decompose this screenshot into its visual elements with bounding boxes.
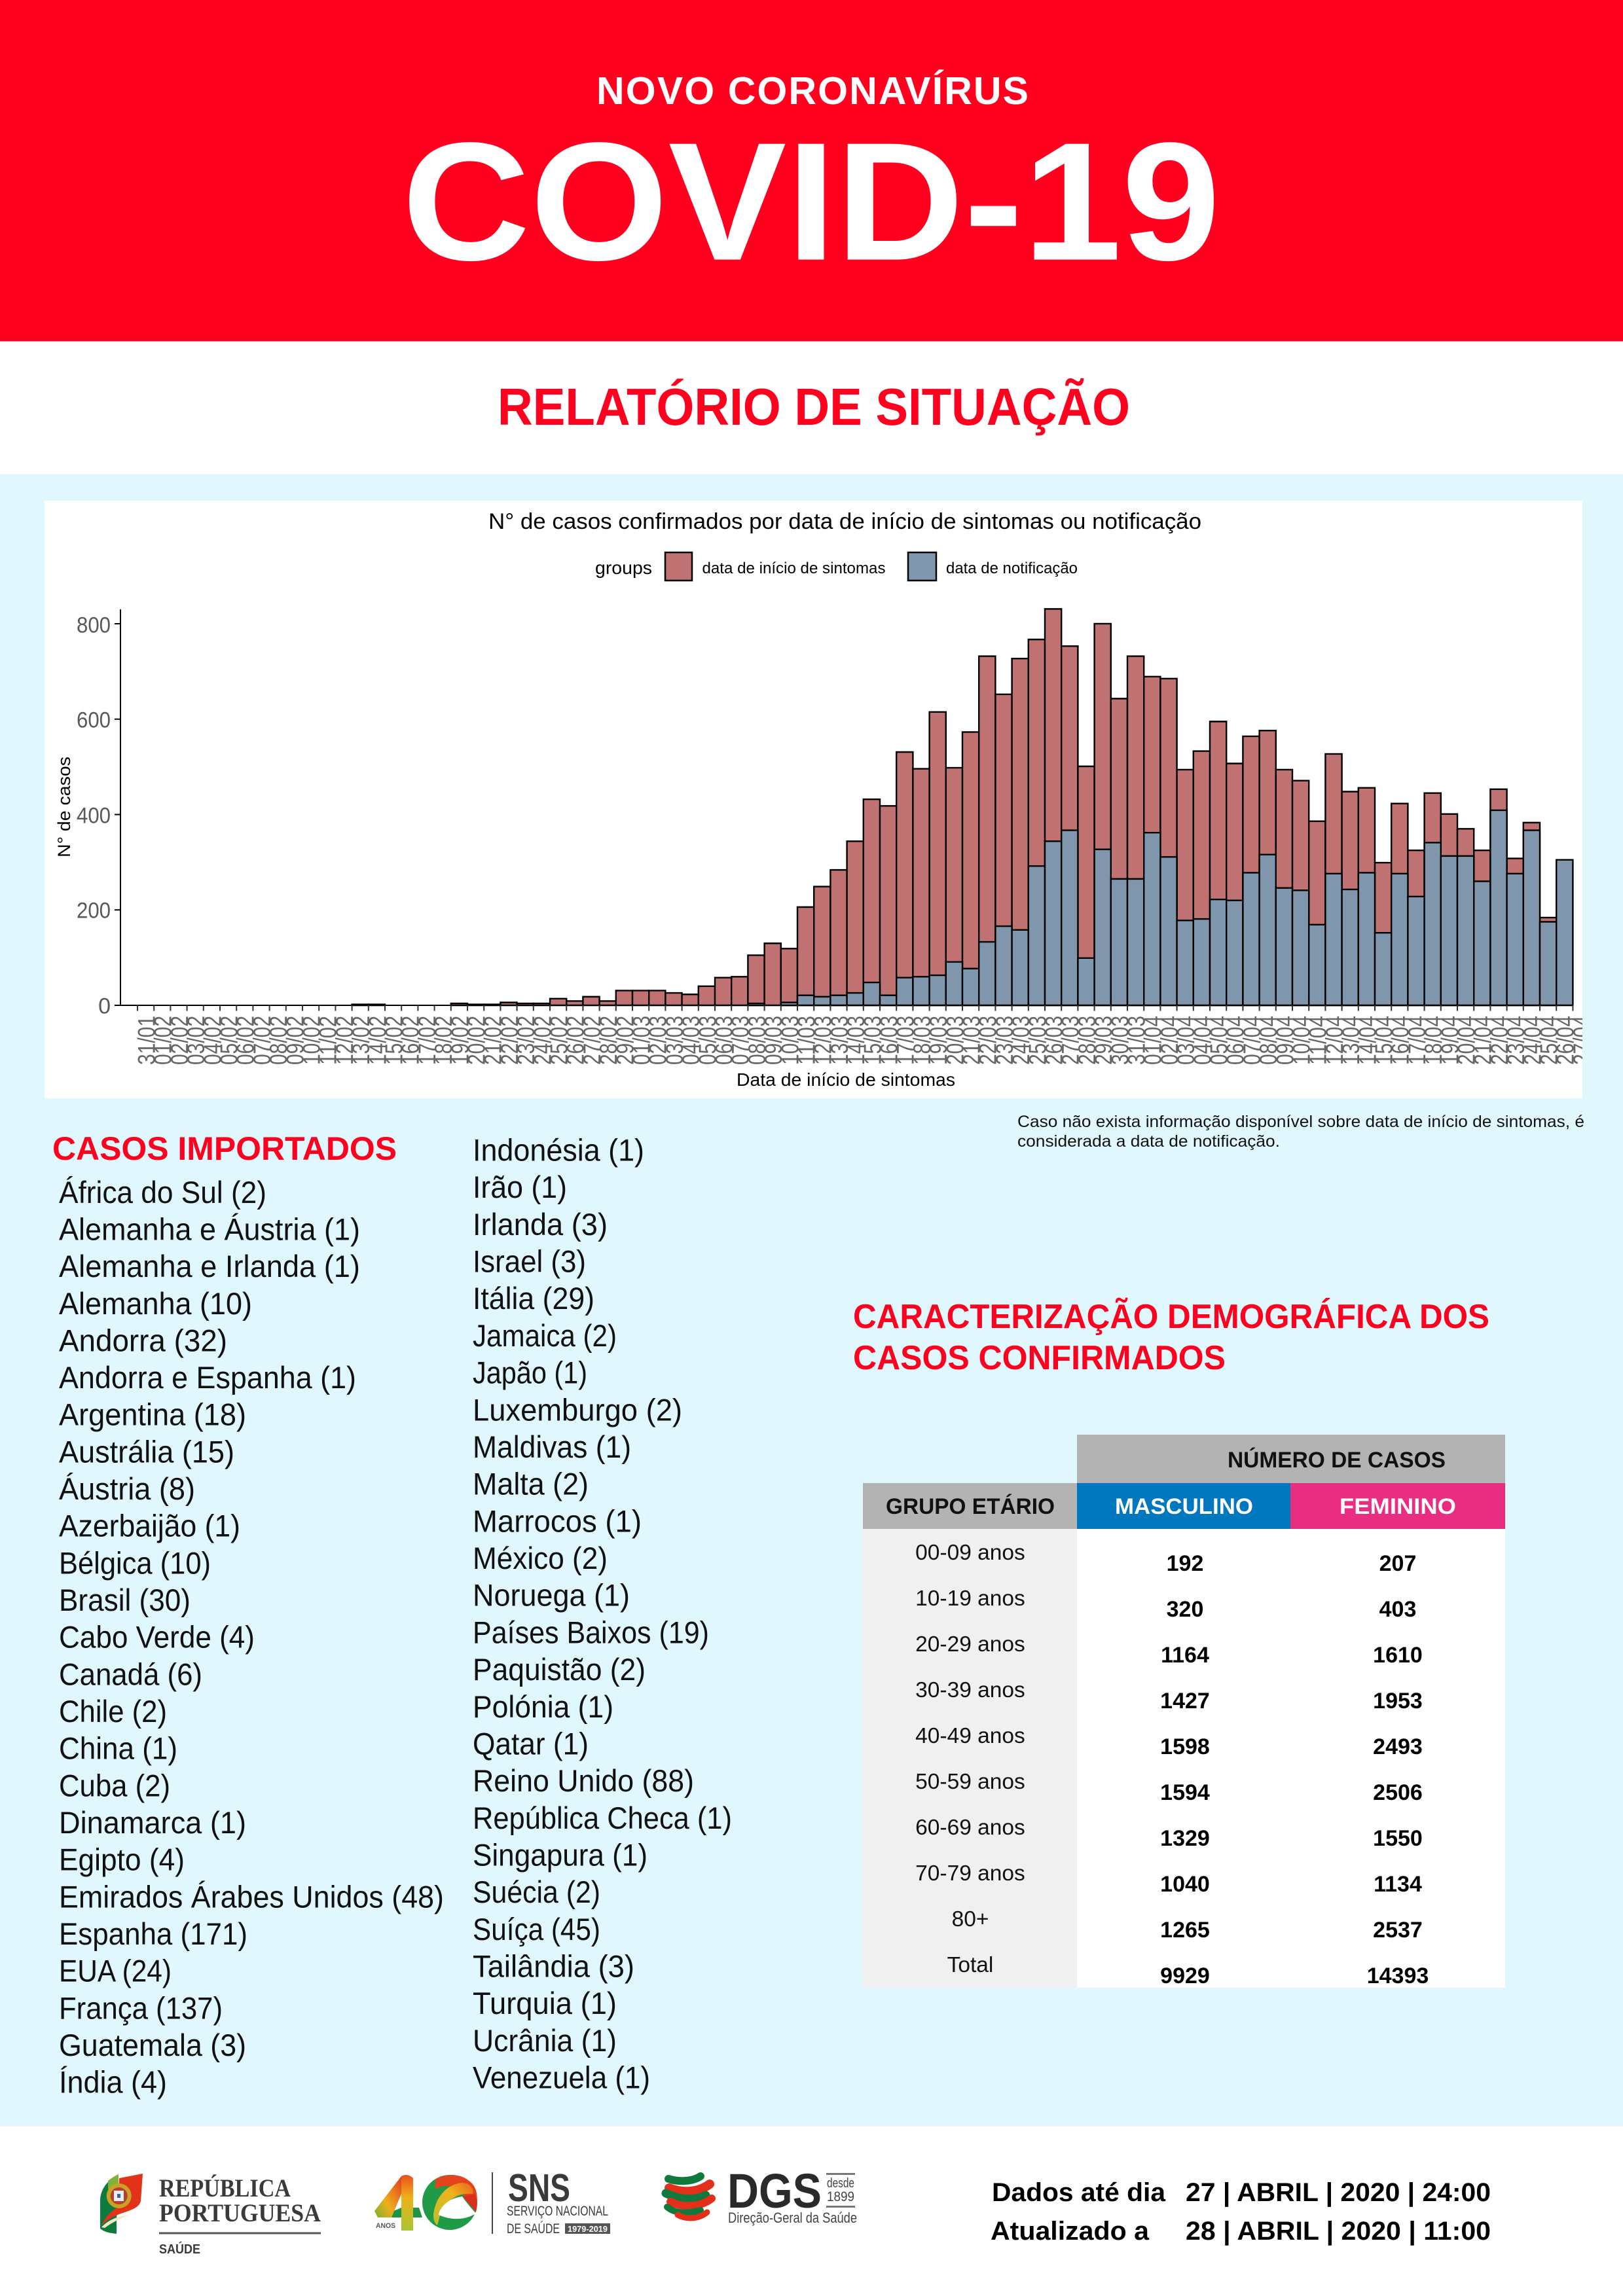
list: imported cases column 2: Venezuela (1) (473, 2060, 650, 2095)
list: imported cases column 2: República Checa (1) (473, 1801, 732, 1835)
x axis date labels: 20/04 (1453, 1016, 1480, 1065)
female case counts: 207 (1379, 1551, 1416, 1576)
demographic table (863, 1435, 1505, 1988)
x axis date labels: 09/02 (282, 1016, 308, 1065)
x axis date labels: 19/03 (925, 1016, 952, 1065)
x axis date labels: 06/03 (711, 1016, 737, 1065)
list: imported cases column 1: Dinamarca (1) (59, 1805, 246, 1840)
list: imported cases column 1: Austrália (15) (59, 1434, 234, 1469)
x axis date labels: 04/02 (199, 1016, 226, 1065)
list: imported cases column 2: Polónia (1) (473, 1689, 613, 1724)
x axis date labels: 06/02 (232, 1016, 259, 1065)
bars: data de início de sintomas (352, 609, 1556, 1005)
list: imported cases column 2: Malta (2) (473, 1467, 589, 1501)
list: imported cases column 2: Jamaica (2) (473, 1318, 617, 1353)
x axis date labels: 03/03 (661, 1016, 688, 1065)
x axis date labels: 02/04 (1156, 1016, 1183, 1065)
icon: DGS striped shield (666, 2176, 712, 2218)
x axis date labels: 16/02 (397, 1016, 424, 1065)
x axis date labels: 09/03 (760, 1016, 787, 1065)
male case counts: 1598 (1160, 1734, 1210, 1759)
x axis date labels: 27/03 (1057, 1016, 1084, 1065)
x axis date labels: 22/03 (975, 1016, 1002, 1065)
list: imported cases column 1: Cuba (2) (59, 1768, 170, 1803)
female case counts: 2506 (1373, 1780, 1423, 1805)
table header labels: MASCULINO (1115, 1494, 1253, 1519)
report heading: RELATÓRIO DE SITUAÇÃO (498, 378, 1130, 436)
x axis date labels: 05/04 (1206, 1016, 1232, 1065)
x axis date labels: 12/02 (331, 1016, 358, 1065)
x axis date labels: 14/02 (364, 1016, 391, 1065)
chart title: N° de casos confirmados por data de início de sintomas ou notificação (488, 509, 1201, 534)
x axis date labels: 12/03 (810, 1016, 837, 1065)
x axis date labels: 23/04 (1503, 1016, 1529, 1065)
y axis labels: 0 (98, 994, 111, 1018)
x axis date labels: 27/02 (579, 1016, 606, 1065)
list: imported cases column 2: Turquia (1) (473, 1986, 617, 2020)
x axis date labels: 19/04 (1436, 1016, 1463, 1065)
list: imported cases column 2: Irlanda (3) (473, 1207, 608, 1242)
x axis date labels: 23/02 (513, 1016, 539, 1065)
female case counts: 14393 (1367, 1964, 1429, 1988)
x axis date labels: 27/04 (1569, 1016, 1596, 1065)
male case counts: 1427 (1160, 1689, 1210, 1713)
logo: SNS 40 anos (374, 2166, 610, 2236)
list: imported cases column 1: Argentina (18) (59, 1397, 246, 1432)
chart legend: data de notificação (946, 560, 1078, 577)
list: imported cases column 2 (473, 1132, 732, 2095)
list: imported cases column 1: Índia (4) (59, 2065, 167, 2100)
x axis date labels: 10/02 (299, 1016, 325, 1065)
wordmark SNS: SNS (508, 2166, 570, 2210)
x axis date labels: 28/02 (595, 1016, 622, 1065)
female case counts: 1953 (1373, 1689, 1423, 1713)
main title: COVID-19 (402, 108, 1220, 296)
age group labels: 00-09 anos (915, 1541, 1025, 1565)
x axis date labels: 08/02 (265, 1016, 292, 1065)
x axis date labels: 10/04 (1288, 1016, 1315, 1065)
date block: 27 | ABRIL | 2020 | 24:00 (1186, 2178, 1491, 2207)
list: imported cases column 1: Canadá (6) (59, 1657, 202, 1691)
x axis date labels: 23/03 (991, 1016, 1018, 1065)
list: imported cases column 2: Qatar (1) (473, 1726, 589, 1761)
table header labels: NÚMERO DE CASOS (1228, 1448, 1446, 1473)
male case counts: 192 (1167, 1551, 1203, 1576)
light blue content panel (0, 474, 1623, 2126)
x axis date labels: 15/04 (1371, 1016, 1397, 1065)
list: imported cases column 1: Chile (2) (59, 1694, 167, 1729)
x axis date labels: 28/03 (1074, 1016, 1101, 1065)
female case counts: 2537 (1373, 1918, 1423, 1943)
x axis date labels: 24/04 (1519, 1016, 1546, 1065)
panel: epidemic curve chart (45, 501, 1596, 1098)
x axis date labels: 05/03 (694, 1016, 721, 1065)
y axis labels: 800 (77, 613, 111, 637)
list: imported cases column 1: Cabo Verde (4) (59, 1620, 255, 1655)
x axis date labels: 21/02 (480, 1016, 507, 1065)
chart legend: data de início de sintomas (702, 560, 885, 577)
x axis date labels: 17/03 (892, 1016, 919, 1065)
female case counts: 1610 (1373, 1643, 1423, 1668)
list: imported cases column 1: China (1) (59, 1731, 177, 1766)
list: imported cases column 2: Israel (3) (473, 1244, 586, 1279)
age group labels: 10-19 anos (915, 1587, 1025, 1611)
list: imported cases column 1: Alemanha e Áustria (1) (59, 1212, 360, 1247)
x axis date labels: 01/04 (1140, 1016, 1167, 1065)
x axis date labels: 31/01 (134, 1016, 160, 1065)
x axis date labels: 26/04 (1552, 1016, 1579, 1065)
x axis date labels: 13/02 (348, 1016, 374, 1065)
list: imported cases column 1 (59, 1175, 444, 2100)
x axis date labels: 29/03 (1090, 1016, 1117, 1065)
y axis title: N° de casos (54, 757, 74, 857)
x axis date labels: 25/04 (1536, 1016, 1562, 1065)
list: imported cases column 1: Guatemala (3) (59, 2028, 246, 2062)
list: imported cases column 1: Emirados Árabes Unidos (48) (59, 1879, 444, 1914)
female case counts: 2493 (1373, 1734, 1423, 1759)
list: imported cases column 2: Indonésia (1) (473, 1132, 644, 1168)
wordmark SNS: 1979-2019 (568, 2224, 608, 2234)
x axis date labels: 04/03 (678, 1016, 704, 1065)
list: imported cases column 2: Paquistão (2) (473, 1652, 646, 1687)
list: imported cases column 1: Bélgica (10) (59, 1545, 211, 1580)
heading: caracterização demográfica: CARACTERIZAÇÃO DEMOGRÁFICA DOS (853, 1297, 1489, 1336)
logo: república portuguesa (100, 2174, 321, 2257)
x axis date labels: 11/03 (793, 1016, 820, 1065)
male case counts: 1040 (1160, 1872, 1210, 1897)
x axis date labels: 21/03 (958, 1016, 985, 1065)
date block (991, 2178, 1491, 2246)
heading: caracterização demográfica: CASOS CONFIRMADOS (853, 1339, 1226, 1377)
list: imported cases column 2: Irão (1) (473, 1170, 567, 1204)
list: imported cases column 1: EUA (24) (59, 1954, 172, 1988)
male case counts: 9929 (1160, 1964, 1210, 1988)
chart legend (595, 552, 1078, 581)
x axis date labels: 07/03 (727, 1016, 754, 1065)
list: imported cases column 2: Luxemburgo (2) (473, 1392, 682, 1427)
wordmark: SAÚDE (159, 2241, 200, 2257)
x axis date labels: 16/04 (1387, 1016, 1414, 1065)
x axis date labels: 12/04 (1321, 1016, 1348, 1065)
x axis date labels: 02/03 (645, 1016, 672, 1065)
x axis date labels: 18/04 (1420, 1016, 1447, 1065)
x axis date labels: 20/02 (464, 1016, 490, 1065)
table header labels (886, 1448, 1456, 1519)
date block: Atualizado a (991, 2217, 1150, 2246)
x axis date labels: 03/02 (183, 1016, 210, 1065)
list: imported cases column 2: México (2) (473, 1541, 608, 1575)
x axis date labels: 15/03 (859, 1016, 886, 1065)
age group labels (915, 1541, 1025, 1977)
icon: flag emblem (100, 2174, 143, 2234)
wordmark DGS: desde (827, 2176, 854, 2191)
male case counts: 1265 (1160, 1918, 1210, 1943)
x axis date labels: 20/03 (941, 1016, 968, 1065)
x axis date labels (134, 1016, 1596, 1065)
x axis date labels: 08/03 (744, 1016, 771, 1065)
female case counts: 1134 (1374, 1872, 1422, 1897)
list: imported cases column 2: Suíça (45) (473, 1912, 600, 1946)
age group labels: Total (947, 1953, 993, 1977)
list: imported cases column 1: França (137) (59, 1990, 223, 2025)
list: imported cases column 2: Maldivas (1) (473, 1429, 631, 1464)
age group labels: 50-59 anos (915, 1770, 1025, 1794)
x axis date labels: 05/02 (216, 1016, 242, 1065)
chart legend: groups (595, 558, 652, 578)
icon: number 40 (374, 2175, 477, 2231)
x axis date labels: 11/02 (315, 1016, 342, 1065)
x axis date labels: 18/02 (430, 1016, 457, 1065)
x axis date labels: 07/04 (1239, 1016, 1266, 1065)
x axis date labels: 11/04 (1305, 1016, 1332, 1065)
x axis date labels: 25/02 (546, 1016, 572, 1065)
female case counts: 1550 (1373, 1826, 1423, 1851)
wordmark DGS: DGS (727, 2164, 822, 2218)
x axis date labels: 18/03 (909, 1016, 936, 1065)
x axis date labels: 06/04 (1222, 1016, 1249, 1065)
x axis date labels: 03/04 (1173, 1016, 1199, 1065)
bars: data de notificação (748, 810, 1573, 1005)
x axis date labels: 08/04 (1255, 1016, 1282, 1065)
chart footnote (1017, 1113, 1584, 1151)
x axis date labels: 01/03 (629, 1016, 655, 1065)
x axis date labels: 25/03 (1024, 1016, 1051, 1065)
heading: casos importados: CASOS IMPORTADOS (52, 1130, 397, 1167)
x axis date labels: 24/03 (1008, 1016, 1034, 1065)
list: imported cases column 1: Andorra (32) (59, 1323, 227, 1357)
male case counts: 1164 (1161, 1643, 1209, 1668)
x axis date labels: 24/02 (529, 1016, 556, 1065)
x axis date labels: 21/04 (1470, 1016, 1497, 1065)
x axis date labels: 13/03 (826, 1016, 853, 1065)
list: imported cases column 2: Reino Unido (88) (473, 1763, 694, 1798)
x axis date labels: 22/02 (496, 1016, 523, 1065)
list: imported cases column 1: Andorra e Espanha (1) (59, 1360, 356, 1395)
male case counts (1160, 1551, 1210, 1988)
age group labels: 70-79 anos (915, 1861, 1025, 1886)
x axis date labels: 30/03 (1106, 1016, 1133, 1065)
x axis title: Data de início de sintomas (737, 1069, 955, 1090)
list: imported cases column 1: Alemanha e Irlanda (1) (59, 1249, 360, 1283)
y axis labels: 200 (77, 898, 111, 923)
age group labels: 60-69 anos (915, 1816, 1025, 1840)
list: imported cases column 2: Japão (1) (473, 1355, 587, 1390)
age group labels: 80+ (952, 1907, 989, 1931)
list: imported cases column 2: Singapura (1) (473, 1838, 647, 1872)
x axis date labels: 17/04 (1404, 1016, 1431, 1065)
table header labels: GRUPO ETÁRIO (886, 1494, 1055, 1519)
list: imported cases column 1: Áustria (8) (59, 1471, 195, 1506)
y axis labels (77, 613, 111, 1018)
x axis date labels: 01/02 (150, 1016, 177, 1065)
list: imported cases column 2: Itália (29) (473, 1281, 594, 1316)
age group labels: 30-39 anos (915, 1678, 1025, 1702)
x axis date labels: 13/04 (1338, 1016, 1364, 1065)
x axis date labels: 22/04 (1486, 1016, 1513, 1065)
x axis date labels: 07/02 (249, 1016, 276, 1065)
date block: Dados até dia (992, 2178, 1166, 2207)
chart footnote: Caso não exista informação disponível sobre data de início de sintomas, é (1017, 1113, 1584, 1131)
age group labels: 40-49 anos (915, 1724, 1025, 1748)
wordmark SNS: SERVIÇO NACIONAL (507, 2204, 608, 2219)
x axis date labels: 16/03 (876, 1016, 902, 1065)
age group labels: 20-29 anos (915, 1632, 1025, 1657)
female case counts: 403 (1379, 1597, 1416, 1622)
wordmark DGS: Direção-Geral da Saúde (728, 2210, 857, 2226)
x axis date labels: 29/02 (611, 1016, 638, 1065)
header kicker: NOVO CORONAVÍRUS (596, 69, 1029, 113)
wordmark SNS: DE SAÚDE (507, 2221, 560, 2236)
x axis date labels: 04/04 (1189, 1016, 1216, 1065)
x axis date labels: 09/04 (1271, 1016, 1298, 1065)
male case counts: 1329 (1160, 1826, 1210, 1851)
wordmark DGS: 1899 (827, 2189, 854, 2204)
x axis date labels: 26/03 (1041, 1016, 1067, 1065)
date block: 28 | ABRIL | 2020 | 11:00 (1186, 2217, 1491, 2246)
x axis date labels: 31/03 (1123, 1016, 1150, 1065)
wordmark: PORTUGUESA (159, 2199, 321, 2227)
x axis date labels: 02/02 (166, 1016, 193, 1065)
list: imported cases column 2: Suécia (2) (473, 1874, 600, 1909)
wordmark: REPÚBLICA (159, 2174, 291, 2202)
chart footnote: considerada a data de notificação. (1017, 1132, 1280, 1151)
y axis labels: 400 (77, 804, 111, 829)
list: imported cases column 1: África do Sul (2) (59, 1175, 266, 1210)
x axis date labels: 10/03 (776, 1016, 803, 1065)
header banner (0, 0, 1623, 342)
list: imported cases column 1: Espanha (171) (59, 1916, 247, 1951)
list: imported cases column 2: Noruega (1) (473, 1578, 630, 1613)
male case counts: 320 (1167, 1597, 1203, 1622)
y axis labels: 600 (77, 708, 111, 733)
x axis date labels: 14/04 (1354, 1016, 1381, 1065)
list: imported cases column 2: Ucrânia (1) (473, 2023, 617, 2058)
list: imported cases column 1: Alemanha (10) (59, 1286, 252, 1321)
x axis date labels: 26/02 (562, 1016, 589, 1065)
heading: caracterização demográfica (853, 1297, 1489, 1377)
icon: number 40: ANOS (376, 2222, 395, 2230)
x axis date labels: 14/03 (843, 1016, 869, 1065)
x axis date labels: 17/02 (414, 1016, 441, 1065)
male case counts: 1594 (1160, 1780, 1210, 1805)
x axis date labels: 15/02 (381, 1016, 407, 1065)
logo: DGS (666, 2164, 857, 2226)
list: imported cases column 1: Brasil (30) (59, 1583, 191, 1617)
list: imported cases column 2: Marrocos (1) (473, 1503, 642, 1538)
female case counts (1367, 1551, 1429, 1988)
x axis date labels: 19/02 (447, 1016, 473, 1065)
list: imported cases column 2: Países Baixos (19) (473, 1615, 709, 1649)
list: imported cases column 1: Egipto (4) (59, 1842, 185, 1877)
list: imported cases column 1: Azerbaijão (1) (59, 1509, 240, 1543)
table header labels: FEMININO (1340, 1494, 1456, 1519)
list: imported cases column 2: Tailândia (3) (473, 1949, 634, 1983)
wordmark (159, 2174, 321, 2257)
wordmark SNS (507, 2166, 610, 2236)
